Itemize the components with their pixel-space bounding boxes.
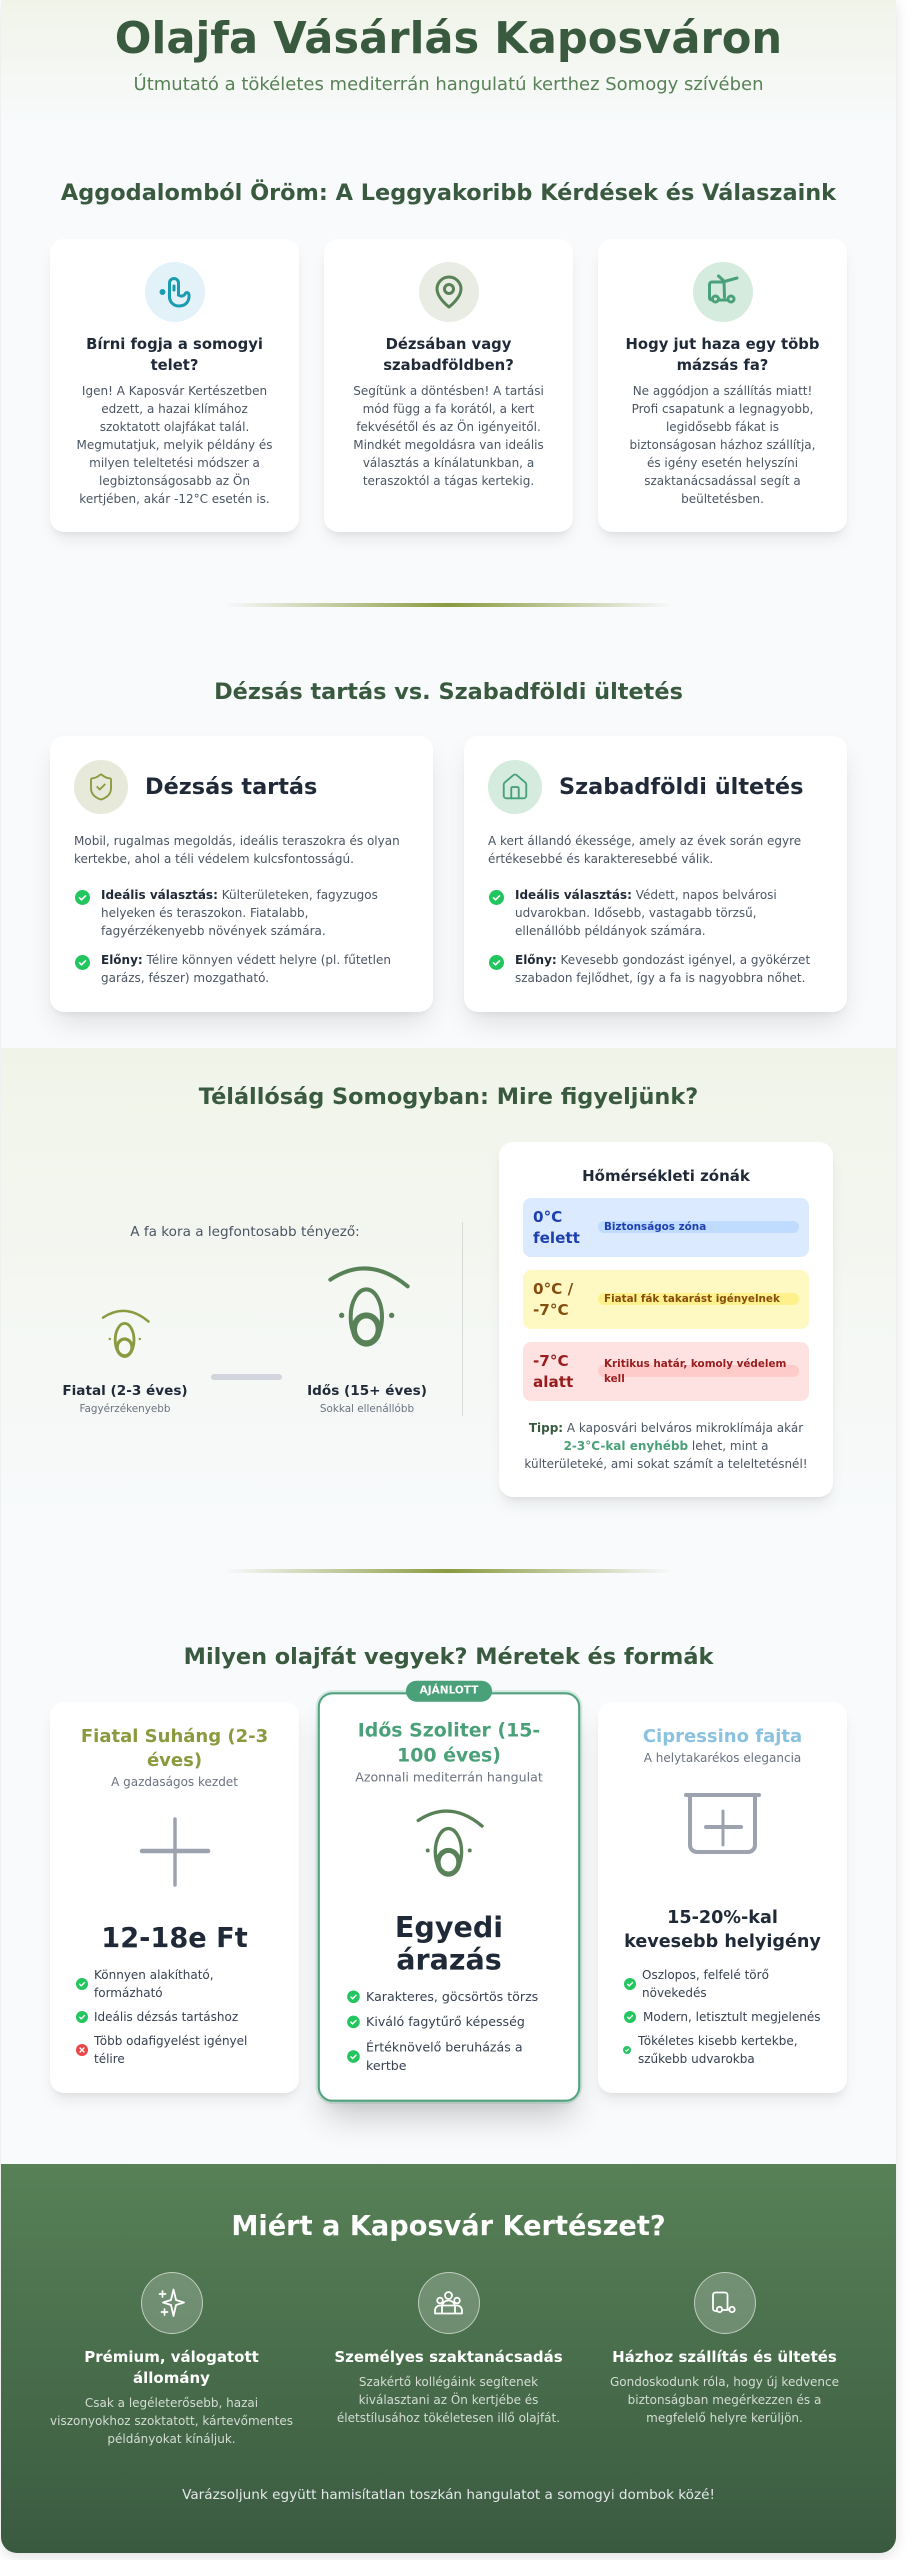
price: Egyedi <box>394 1912 503 1944</box>
feature: Modern, letisztult megjelenés <box>643 2010 820 2024</box>
price <box>394 1912 503 1977</box>
panel: open ground planting <box>464 736 847 1012</box>
zone: caution: Fiatal fák takarást igényelnek <box>604 1293 780 1305</box>
icon: people <box>418 2272 480 2334</box>
drawback: télire <box>94 2052 125 2066</box>
answer: Igen! A Kaposvár Kertészetben <box>82 384 267 398</box>
band: winter hardiness background <box>1 1048 896 1538</box>
column heading: Személyes szaktanácsadás <box>334 2348 563 2366</box>
point: ideal choice: ellenállóbb példányok számára. <box>515 924 706 938</box>
panel: young sapling <box>50 1702 299 2093</box>
point: ideal choice: Ideális választás: Külterületeken, fagyzugos <box>101 888 378 902</box>
column text: kiválasztani az Ön kertjébe és <box>359 2393 538 2407</box>
feature: Könnyen alakítható, <box>94 1968 214 1982</box>
question <box>626 336 819 374</box>
heading: FAQ: Aggodalomból Öröm: A Leggyakoribb Kérdések és Válaszaink <box>61 180 836 206</box>
column text: Csak a legéleterősebb, hazai <box>85 2396 258 2410</box>
zone: caution: 0°C / <box>533 1280 573 1298</box>
point: advantage <box>75 953 391 985</box>
label: young: Fiatal (2-3 éves) <box>62 1383 188 1399</box>
badge <box>405 1681 492 1702</box>
point: advantage: szabadon fejlődhet, így a fa is nagyobbra nőhet. <box>515 971 805 985</box>
feature: kertbe <box>366 2059 406 2073</box>
icon: sparkles <box>141 2272 203 2334</box>
heading: Szabadföldi ültetés <box>559 774 803 800</box>
point: ideal choice: udvarokban. Idősebb, vastagabb törzsű, <box>515 906 757 920</box>
zones heading: Hőmérsékleti zónák <box>582 1167 750 1185</box>
header <box>1 0 896 130</box>
zone: safe: Biztonságos zóna <box>604 1221 706 1233</box>
feature <box>347 2040 522 2073</box>
answer: fekvésétől és az Ön igényeitől. <box>356 420 541 434</box>
icon: tree <box>416 1809 484 1877</box>
answer: legidősebb fákat is <box>666 420 779 434</box>
description: Mobil, rugalmas megoldás, ideális teraszokra és olyan <box>74 834 400 848</box>
closing line: Varázsoljunk együtt hamisítatlan toszkán hangulatot a somogyi dombok közé! <box>182 2487 715 2503</box>
label: young: Fagyérzékenyebb <box>79 1403 170 1415</box>
question: telet? <box>151 357 198 374</box>
point: ideal choice: helyeken és teraszokon. Fiatalabb, <box>101 906 308 920</box>
icon: truck <box>692 262 752 322</box>
icon: map pin <box>418 262 478 322</box>
column text: viszonyokhoz szoktatott, kártevőmentes <box>50 2414 293 2428</box>
zone: critical: alatt <box>533 1372 573 1390</box>
feature <box>624 1968 769 2000</box>
heading: Dézsás tartás <box>145 774 317 800</box>
feature <box>623 2034 798 2066</box>
feature: Oszlopos, felfelé törő <box>642 1968 769 1982</box>
column: personal advice <box>326 2272 571 2452</box>
panel: container keeping <box>50 736 433 1012</box>
column text <box>602 2373 847 2427</box>
heading: sizes and forms: Milyen olajfát vegyek? Méretek és formák <box>184 1644 713 1670</box>
panel: temperature zones <box>499 1142 833 1497</box>
intro text: A fa kora a legfontosabb tényező: <box>130 1224 360 1240</box>
badge: AJÁNLOTT <box>419 1685 478 1696</box>
answer <box>630 384 815 506</box>
point: ideal choice <box>489 888 777 938</box>
description: kertekbe, ahol a téli védelem kulcsfontosságú. <box>74 852 354 866</box>
column text: megfelelő helyre kerüljön. <box>646 2411 803 2425</box>
icon: house <box>488 760 542 814</box>
tip: külterületeké, ami sokat számít a teleltetésnél! <box>524 1457 808 1471</box>
answer: szaktanácsadással segít a <box>644 474 801 488</box>
point: ideal choice: fagyérzékenyebb növények számára. <box>101 924 326 938</box>
heading: winter hardiness: Télállóság Somogyban: Mire figyeljünk? <box>199 1084 698 1110</box>
answer: teraszoktól a tágas kertekig. <box>363 474 534 488</box>
feature <box>76 1968 214 2000</box>
panel: FAQ card 3 <box>598 239 847 532</box>
footer title: Miért a Kaposvár Kertészet? <box>231 2211 666 2242</box>
tip <box>524 1421 808 1471</box>
feature list <box>347 1989 538 2073</box>
answer: kertjében, akár -12°C esetén is. <box>79 492 270 506</box>
heading: planting comparison: Dézsás tartás vs. Szabadföldi ültetés <box>214 679 683 705</box>
column text: példányokat kínáljuk. <box>107 2432 236 2446</box>
panel: footer why us <box>1 2164 896 2553</box>
drawback: Több odafigyelést igényel <box>94 2034 247 2048</box>
icon: old tree <box>328 1266 410 1347</box>
feature: növekedés <box>642 1986 707 2000</box>
feature list <box>623 1968 820 2066</box>
label: old: Sokkal ellenállóbb <box>320 1403 414 1415</box>
label: old <box>307 1383 427 1415</box>
description: A kert állandó ékessége, amely az évek során egyre <box>488 834 801 848</box>
answer: Megmutatjuk, melyik példány és <box>76 438 272 452</box>
zone: caution <box>523 1270 809 1329</box>
point: advantage: Előny: Kevesebb gondozást igényel, a gyökérzet <box>515 953 810 967</box>
zone: safe: felett <box>533 1228 580 1246</box>
column text <box>326 2373 571 2427</box>
answer: legbiztonságosabb az Ön <box>99 474 250 488</box>
description <box>74 834 400 866</box>
card subtitle: A helytakarékos elegancia <box>644 1751 801 1765</box>
zone: caution: -7°C <box>533 1300 569 1318</box>
point: ideal choice <box>75 888 378 938</box>
zone: safe <box>523 1198 809 1257</box>
answer: szoktatott olajfákat talál. <box>100 420 249 434</box>
card title: éves) <box>147 1750 202 1771</box>
point: advantage: garázs, fészer) mozgatható. <box>101 971 269 985</box>
answer: milyen teleltetési módszer a <box>89 456 260 470</box>
description <box>488 834 801 866</box>
point: advantage: Előny: Télire könnyen védett helyre (pl. fűtetlen <box>101 953 391 967</box>
icon: shield <box>74 760 128 814</box>
answer: Profi csapatunk a legnagyobb, <box>632 402 813 416</box>
card title <box>81 1726 268 1771</box>
feature: Kiváló fagytűrő képesség <box>366 2015 524 2029</box>
icon: cross sapling <box>140 1817 210 1887</box>
column text: életstílusához tökéletesen illő olajfát. <box>337 2411 560 2425</box>
card title: Fiatal Suháng (2-3 <box>81 1726 268 1747</box>
icon: delivery <box>694 2272 756 2334</box>
point: advantage <box>489 953 810 985</box>
question: Hogy jut haza egy több <box>626 336 819 353</box>
answer: választás a kínálatunkban, a <box>363 456 534 470</box>
tip: Tipp: A kaposvári belváros mikroklímája akár <box>529 1421 803 1435</box>
card subtitle: Azonnali mediterrán hangulat <box>355 1770 542 1785</box>
drawback <box>76 2034 247 2066</box>
card title <box>357 1720 540 1767</box>
question <box>86 336 263 374</box>
column text <box>50 2396 293 2446</box>
zone: safe: 0°C <box>533 1208 562 1226</box>
answer: biztonságosan házhoz szállítja, <box>630 438 815 452</box>
title: Olajfa Vásárlás Kaposváron <box>115 14 782 64</box>
feature: Értéknövelő beruházás a <box>366 2040 522 2054</box>
price: 12-18e Ft <box>101 1923 248 1954</box>
icon: young tree <box>102 1310 150 1358</box>
feature: Karakteres, göcsörtös törzs <box>366 1989 538 2004</box>
label: old: Idős (15+ éves) <box>307 1383 427 1399</box>
column text: Szakértő kollégáink segítenek <box>359 2375 538 2389</box>
answer: mód függ a fa korától, a kert <box>363 402 534 416</box>
card title: Idős Szoliter (15- <box>357 1720 540 1742</box>
panel: tree age comparison <box>60 1222 463 1416</box>
answer: edzett, a hazai klímához <box>101 402 248 416</box>
answer: Mindkét megoldásra van ideális <box>353 438 544 452</box>
feature: szűkebb udvarokba <box>638 2052 755 2066</box>
answer <box>353 384 544 488</box>
answer: és igény esetén helyszíni <box>647 456 798 470</box>
zone: critical: Kritikus határ, komoly védelem <box>604 1358 786 1370</box>
card title: 100 éves) <box>397 1745 500 1767</box>
feature: Ideális dézsás tartáshoz <box>94 2010 238 2024</box>
note <box>624 1908 821 1952</box>
question: Dézsában vagy <box>386 336 511 353</box>
question: szabadföldben? <box>383 357 514 374</box>
card subtitle: A gazdaságos kezdet <box>111 1775 238 1789</box>
card frame <box>317 1692 580 2102</box>
column heading: állomány <box>133 2369 210 2387</box>
question <box>383 336 514 374</box>
age bar <box>211 1374 282 1380</box>
point: ideal choice: Ideális választás: Védett, napos belvárosi <box>515 888 777 902</box>
description: értékesebbé és karakteresebbé válik. <box>488 852 713 866</box>
answer <box>76 384 272 506</box>
zone: critical: -7°C <box>533 1352 569 1370</box>
column text: biztonságban megérkezzen és a <box>628 2393 821 2407</box>
card title: Cipressino fajta <box>643 1726 802 1747</box>
answer: beültetésben. <box>681 492 764 506</box>
feature: Tökéletes kisebb kertekbe, <box>638 2034 798 2048</box>
column: premium stock <box>50 2272 293 2446</box>
column heading: Házhoz szállítás és ültetés <box>612 2348 837 2366</box>
column text: Gondoskodunk róla, hogy új kedvence <box>610 2375 839 2389</box>
feature: formázható <box>94 1986 163 2000</box>
label: young <box>62 1383 188 1415</box>
column: delivery <box>602 2272 847 2452</box>
tip: 2-3°C-kal enyhébb lehet, mint a <box>564 1439 768 1453</box>
subtitle: Útmutató a tökéletes mediterrán hangulatú kerthez Somogy szívében <box>134 74 763 95</box>
panel: FAQ card 2 <box>324 239 573 532</box>
question: Bírni fogja a somogyi <box>86 336 263 353</box>
panel: cipressino <box>598 1702 847 2093</box>
column heading: Prémium, válogatott <box>84 2348 259 2366</box>
price: árazás <box>396 1944 501 1977</box>
icon: pot with plant <box>684 1793 761 1854</box>
question: mázsás fa? <box>677 357 768 374</box>
zone: critical <box>523 1342 809 1401</box>
zone: critical: kell <box>604 1373 625 1385</box>
column heading <box>84 2348 259 2387</box>
icon: hand <box>144 262 204 322</box>
panel: old specimen recommended <box>310 1680 588 2132</box>
answer: Ne aggódjon a szállítás miatt! <box>633 384 812 398</box>
answer: Segítünk a döntésben! A tartási <box>353 384 544 398</box>
note: 15-20%-kal <box>667 1908 778 1928</box>
panel: FAQ card 1 <box>50 239 299 532</box>
feature list <box>76 1968 247 2066</box>
note: kevesebb helyigény <box>624 1932 821 1952</box>
